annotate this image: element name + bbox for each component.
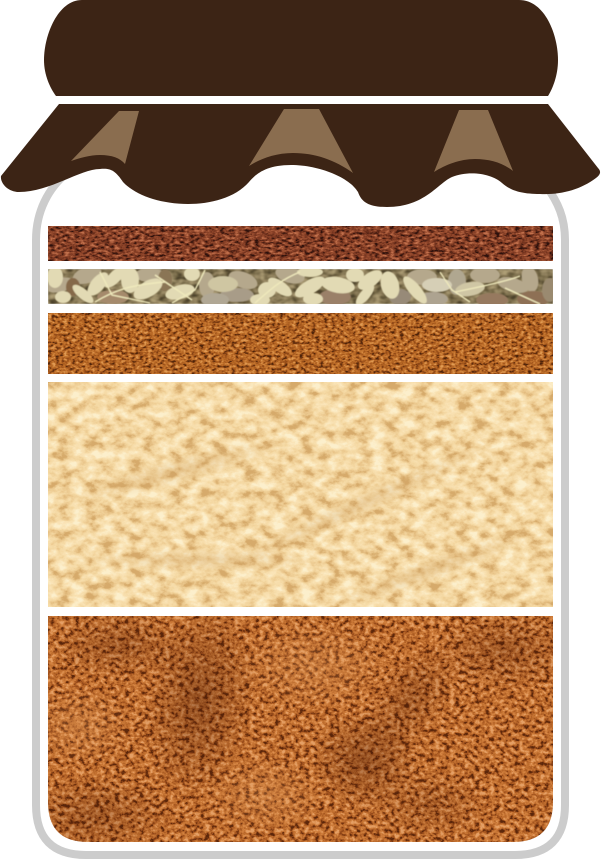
spice layer 5: cinnamon powder [48,616,553,842]
spice layer 2: fennel seeds [48,269,553,304]
jar outline [36,172,565,855]
spice layer 4: pale cream powder [48,382,553,619]
cloth fold: right highlight [434,110,513,172]
spice layer 3: orange-brown powder [48,313,553,374]
lid: jar cap cover [44,0,558,96]
spice layer 1: dark red-brown powder [48,226,553,261]
cloth: scalloped fabric skirt [1,104,600,207]
cloth fold: centre highlight [249,109,353,173]
cloth fold: left highlight [71,111,139,164]
